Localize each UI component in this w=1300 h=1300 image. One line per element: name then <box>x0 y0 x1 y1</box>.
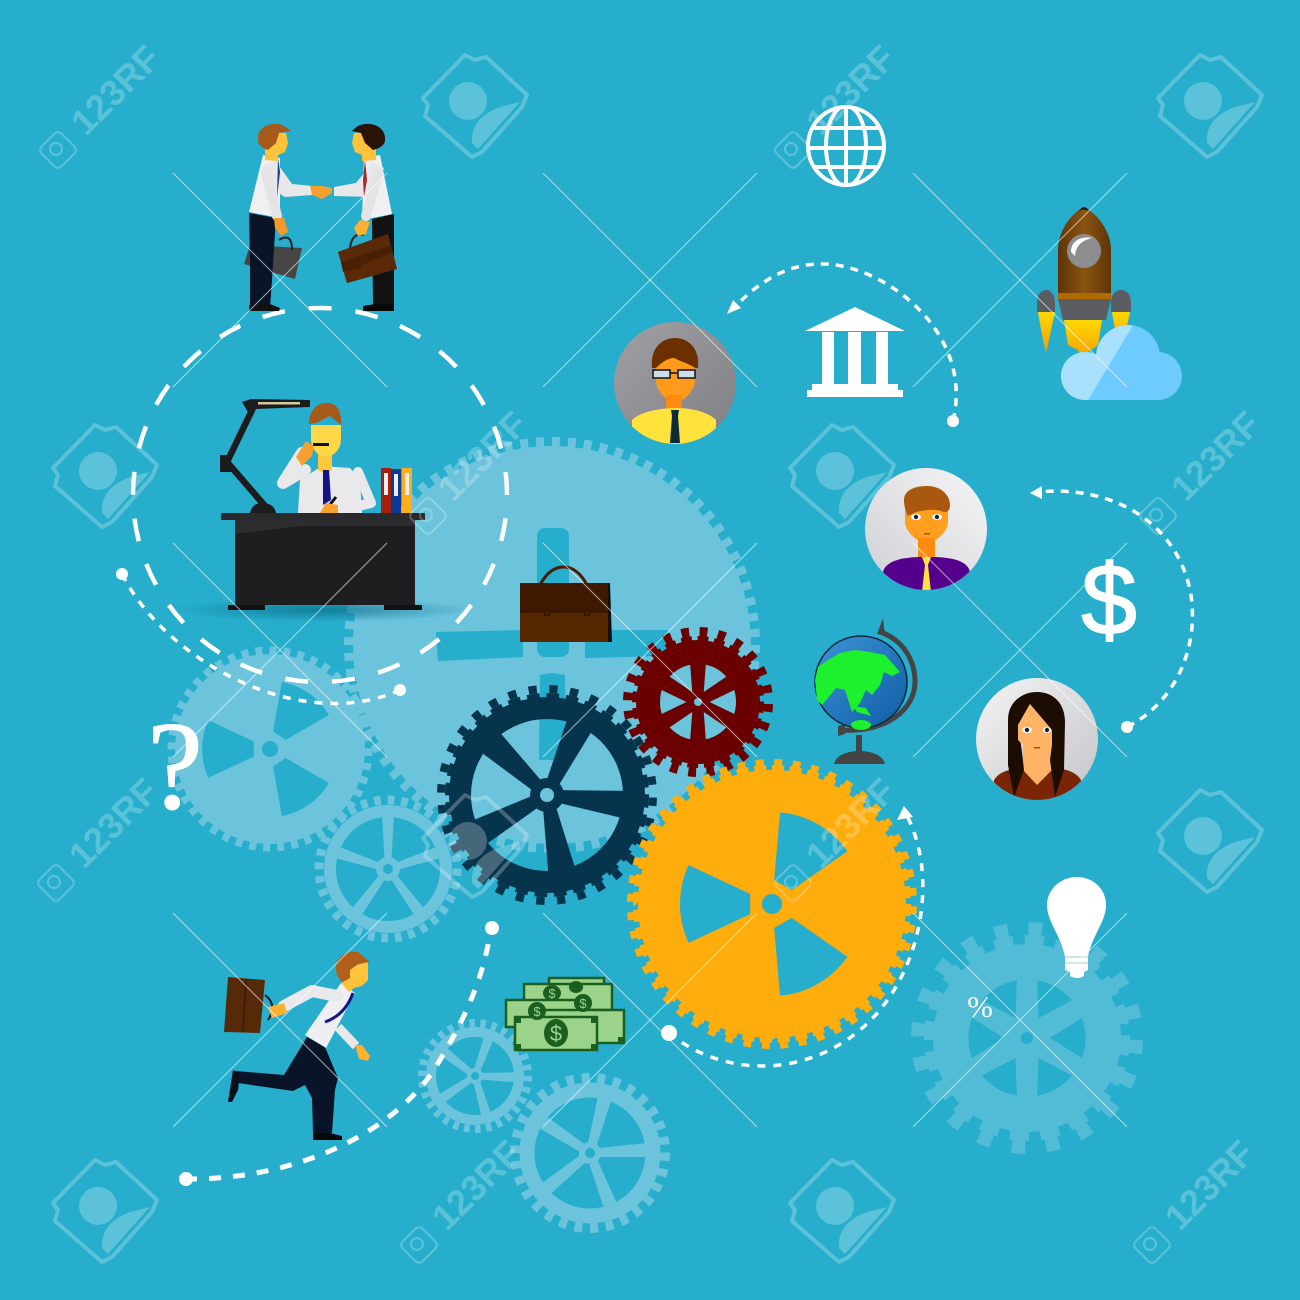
dashed path: lower left <box>179 921 499 1186</box>
icon: cloud <box>1060 322 1184 402</box>
gear: dark navy gear <box>441 689 653 901</box>
watermark: 123RF marks: 123RF <box>63 37 168 143</box>
icon: question mark: ? <box>147 697 203 836</box>
avatar: man with purple jacket <box>865 468 987 600</box>
watermark: 123RF marks: 123RF <box>798 37 903 143</box>
dashed arrow: right arc <box>1030 486 1192 733</box>
icon: wireframe globe <box>806 106 886 186</box>
gear: pale bottom small gear <box>422 1023 528 1129</box>
icon: desk globe <box>815 618 915 764</box>
gear: large pale background gear with cross window <box>349 442 755 848</box>
figure: businessman at desk <box>172 399 472 622</box>
icon: bank building <box>805 307 905 397</box>
seated man <box>298 466 362 513</box>
icon: stack of money: $ <box>550 1021 562 1046</box>
desk <box>221 513 425 520</box>
icon: light bulb <box>1047 877 1106 978</box>
avatar: woman with glasses <box>614 322 736 450</box>
dashed ring around desk <box>133 308 507 682</box>
dashed arrow: around orange gear <box>661 806 923 1066</box>
icon: stack of money <box>506 978 624 1050</box>
icon: stack of money: $ <box>579 996 587 1011</box>
figure: running businessman <box>224 952 370 1140</box>
binders <box>381 468 391 513</box>
dashed arrow: top right arc <box>727 264 959 427</box>
dashed path: under desk ring <box>116 568 406 703</box>
icon: stack of money: $ <box>548 986 556 1001</box>
icon: briefcase <box>520 567 612 642</box>
gear: pale bottom larger gear <box>515 1078 665 1228</box>
avatar: woman with long dark hair <box>976 678 1098 805</box>
icon: stack of money: $ <box>533 1004 541 1019</box>
gear: pale left gear with radiation windows <box>172 651 368 847</box>
figure: two businessmen shaking hands <box>244 124 397 311</box>
gear: pale right gear <box>919 930 1135 1146</box>
gear: pale lower middle gear <box>319 800 457 938</box>
percent sign: % <box>967 989 993 1024</box>
desk shadow <box>172 598 472 622</box>
gear: large orange gear <box>631 763 913 1045</box>
gear: dark red gear <box>628 632 768 772</box>
lamp <box>220 399 310 513</box>
icon: rocket <box>1037 207 1131 362</box>
watermark: 123RF marks: 123RF <box>1157 1132 1262 1238</box>
icon: dollar sign: $ <box>1081 544 1137 656</box>
watermark: 123RF marks: 123RF <box>798 770 903 876</box>
watermark: 123RF marks: 123RF <box>1163 403 1268 509</box>
watermark: 123RF marks: 123RF <box>430 403 535 509</box>
watermark: 123RF marks: 123RF <box>424 1132 529 1238</box>
watermark: 123RF marks: 123RF <box>61 770 166 876</box>
